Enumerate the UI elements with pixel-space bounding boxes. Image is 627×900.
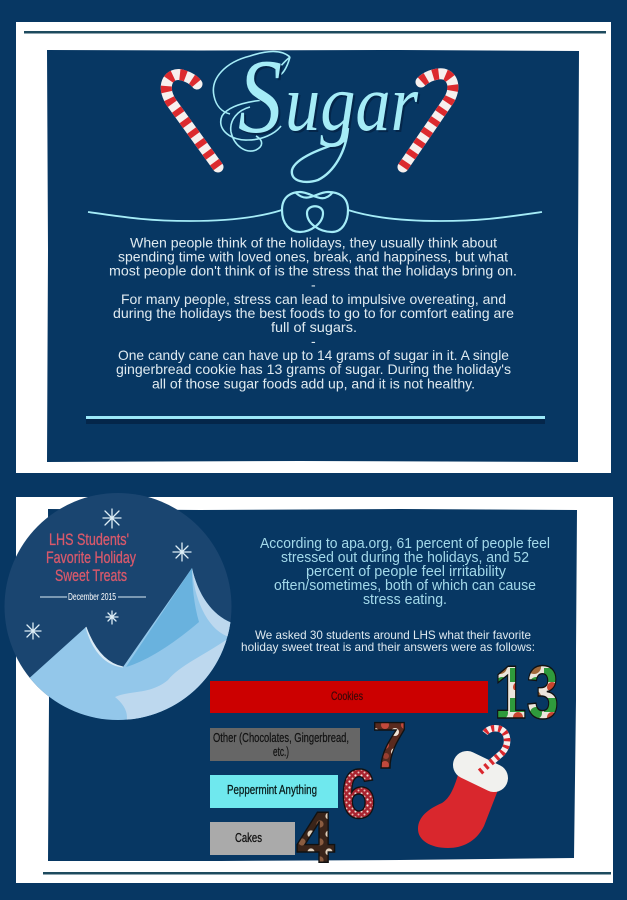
panel navy card: [48, 509, 577, 861]
panel navy card: [47, 50, 579, 462]
top rule: [24, 31, 606, 34]
intro paragraphs: full of sugars.: [271, 319, 357, 335]
stocking cuff: [467, 765, 494, 778]
survey intro text: holiday sweet treat is and their answers were as follows:: [241, 640, 535, 654]
bar: cakes 4: 4: [296, 798, 335, 878]
panel: student survey: [4, 493, 613, 883]
stress statistics text: often/sometimes, both of which can cause: [274, 578, 536, 594]
badge date: December 2015: [68, 592, 116, 603]
title swashes: [213, 52, 290, 151]
intro paragraphs: gingerbread cookie has 13 grams of sugar. During the holiday's: [116, 361, 511, 377]
stress statistics text: stress eating.: [363, 592, 447, 608]
bar: cakes 4: Cakes: [235, 830, 262, 845]
title: Sugar: [213, 38, 421, 182]
intro paragraphs: most people don't think of is the stress that the holidays bring on.: [109, 262, 517, 278]
bottom rule: [43, 872, 611, 874]
stress statistics text: [260, 536, 550, 608]
bar: cookies 13: [210, 650, 559, 734]
bar: cakes 4: [210, 798, 335, 878]
bar: peppermint anything 6: [210, 755, 376, 833]
intro paragraphs: -: [311, 333, 316, 349]
badge disc: [4, 493, 232, 720]
stocking cane: [480, 728, 507, 772]
panel white frame: [16, 497, 613, 883]
bar: other 7: etc.): [273, 745, 289, 759]
title letters: ugar: [285, 60, 419, 148]
intro paragraphs: spending time with loved ones, break, and happiness, but what: [118, 248, 508, 264]
closing rule: [86, 416, 545, 424]
badge title: LHS Students': [49, 530, 129, 549]
intro paragraphs: When people think of the holidays, they usually think about: [130, 234, 497, 250]
stress statistics text: According to apa.org, 61 percent of people feel: [260, 536, 550, 552]
snowflakes: [25, 509, 191, 639]
intro paragraphs: during the holidays the best foods to go to for comfort eating are: [113, 305, 514, 321]
survey intro text: [241, 628, 535, 654]
badge title: Sweet Treats: [55, 566, 127, 585]
badge title: [46, 530, 136, 585]
stress statistics text: stressed out during the holidays, and 52: [281, 550, 529, 566]
stress statistics text: percent of people feel irritability: [306, 564, 507, 580]
intro paragraphs: For many people, stress can lead to impulsive overeating, and: [121, 291, 506, 307]
badge date: [40, 592, 146, 603]
title shadow: S: [240, 40, 284, 157]
intro paragraphs: all of those sugar foods add up, and it is not healthy.: [152, 376, 475, 392]
ornamental divider: [88, 192, 542, 232]
title letter S: S: [238, 38, 282, 155]
g descender loop: [292, 128, 348, 182]
bar: other 7: [210, 708, 407, 782]
icon: right candy cane: [403, 74, 453, 167]
panel white frame: [16, 22, 611, 473]
intro paragraphs: [109, 234, 517, 392]
bar chart: favorite sweet treats: [210, 650, 559, 878]
survey intro text: We asked 30 students around LHS what their favorite: [255, 628, 531, 642]
title letters shadow: ugar: [287, 62, 421, 150]
badge title: Favorite Holiday: [46, 548, 136, 567]
bar: peppermint anything 6: 6: [341, 755, 376, 833]
icon: stocking with candy cane: [418, 728, 507, 848]
bar: cookies 13: Cookies: [331, 689, 363, 703]
bar: other 7: 7: [372, 708, 407, 782]
bar: peppermint anything 6: Peppermint Anything: [227, 782, 317, 797]
stocking body: [418, 775, 498, 848]
intro paragraphs: One candy cane can have up to 14 grams of sugar in it. A single: [118, 347, 509, 363]
bar: other 7: Other (Chocolates, Gingerbread,: [213, 731, 349, 745]
bar: cookies 13: 13: [494, 650, 559, 734]
intro paragraphs: -: [311, 276, 316, 292]
icon: left candy cane: [166, 75, 218, 167]
circular survey badge: [4, 493, 232, 725]
panel: sugar introduction: [16, 22, 611, 473]
snowy mountains: [25, 568, 232, 725]
